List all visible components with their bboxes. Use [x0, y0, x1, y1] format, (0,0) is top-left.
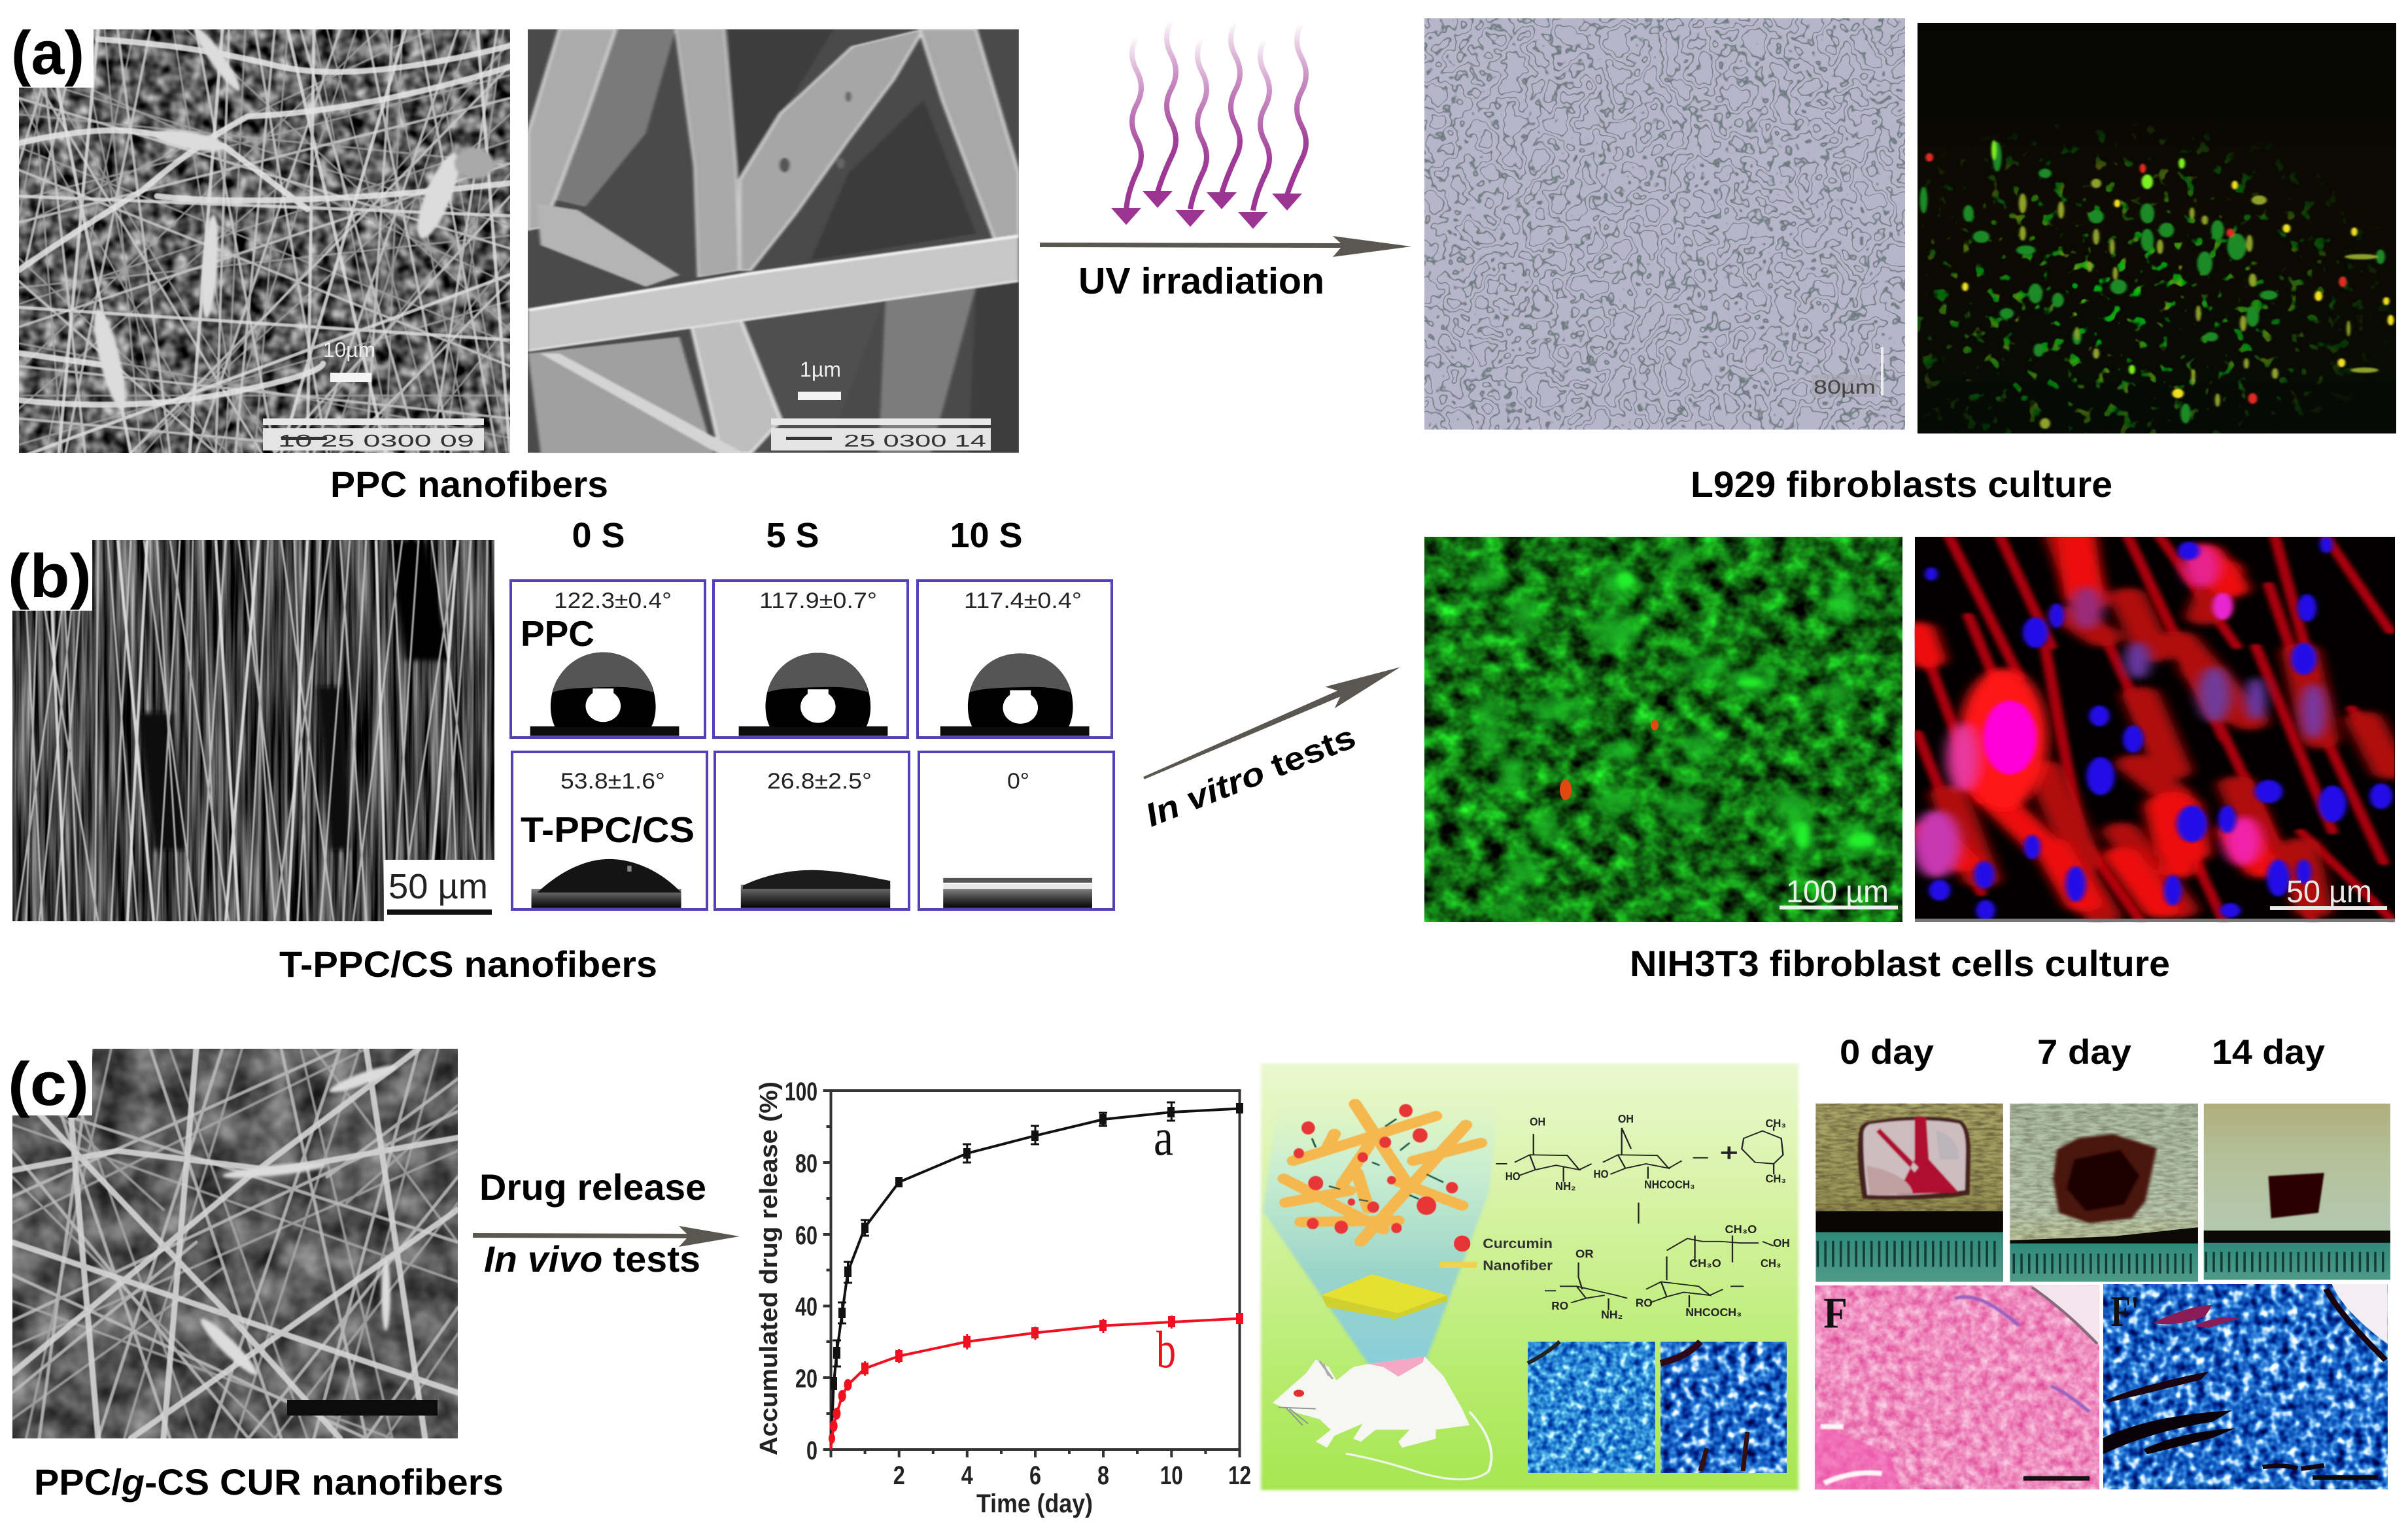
chemical scheme: HO	[1594, 1168, 1609, 1181]
scale label: 1 µm: 1µm	[800, 358, 841, 381]
series b	[829, 1313, 1243, 1450]
inset: stained tissue right	[1660, 1342, 1787, 1473]
panel: curcumin nanofiber schematic	[1261, 1063, 1798, 1490]
mouse	[1273, 1357, 1492, 1480]
chemical scheme	[1496, 1113, 1790, 1321]
chart tick labels: 80	[795, 1149, 817, 1178]
series label b: b	[1156, 1321, 1176, 1379]
panel: L929 fluorescence micrograph	[1918, 23, 2396, 433]
chemical scheme: OH	[1773, 1237, 1790, 1249]
chart tick labels: 40	[795, 1293, 817, 1321]
chemical scheme: NH₂	[1601, 1309, 1623, 1321]
chemical scheme: OH	[1618, 1113, 1634, 1125]
beam	[1263, 1098, 1500, 1364]
caption: T-PPC/CS nanofibers: T-PPC/CS nanofibers	[279, 943, 657, 985]
chart axes	[823, 1091, 1240, 1457]
chemical scheme: CH₃	[1765, 1117, 1786, 1130]
chart: accumulated drug release	[755, 1078, 1251, 1518]
contact angle value: 122.3±0.4°	[554, 588, 672, 613]
chart tick labels	[785, 1078, 1251, 1490]
chart tick labels: 20	[795, 1365, 817, 1393]
chemical scheme: CH₃	[1765, 1172, 1786, 1185]
contact angle value: 0°	[1007, 769, 1029, 794]
chemical scheme: CH₃	[1761, 1257, 1781, 1270]
chart tick labels: 100	[785, 1078, 817, 1106]
column headers: wound healing days	[1840, 1033, 2326, 1072]
chemical scheme: CH₃O	[1725, 1223, 1757, 1236]
scale label: 10 µm: 10µm	[323, 338, 375, 362]
SEM info bar: 25 0300 14	[844, 431, 986, 450]
panel: contact angle PPC 0 s	[511, 581, 705, 738]
label: In vivo tests: In vivo tests	[484, 1238, 700, 1280]
panel: contact angle T-PPC/CS 5 s	[715, 752, 909, 909]
chemical scheme: HO	[1505, 1170, 1521, 1183]
scale bar: 50 µm: 50 µm	[388, 867, 488, 906]
column headers: time	[572, 516, 1023, 555]
chemical scheme: CH₃O	[1689, 1257, 1721, 1270]
scale label: 80 µm: 80µm	[1814, 377, 1876, 398]
inset: stained tissue left	[1528, 1342, 1655, 1473]
panel: contact angle PPC 10 s	[918, 581, 1112, 738]
panel: contact angle PPC 5 s	[714, 581, 908, 738]
panel: T-PPC/CS aligned nanofibers SEM	[12, 540, 494, 921]
panel: NIH3T3 green fluorescence	[1424, 537, 1902, 922]
wound photo day 7	[2010, 1104, 2198, 1282]
chemical scheme: OH	[1530, 1115, 1545, 1129]
SEM info bar	[263, 418, 484, 450]
chemical scheme: NHCOCH₃	[1644, 1178, 1695, 1191]
panel: PPC/g-CS CUR nanofibers SEM	[12, 1049, 458, 1438]
chart tick labels: 12	[1228, 1461, 1251, 1490]
series a	[831, 1102, 1243, 1450]
label: UV irradiation: UV irradiation	[1078, 260, 1324, 302]
chart tick labels: 2	[893, 1461, 905, 1490]
chart tick labels: 60	[795, 1221, 817, 1250]
arrow: drug release	[473, 1226, 740, 1247]
contact angle value: 117.4±0.4°	[964, 588, 1082, 613]
contact angle value: 26.8±2.5°	[767, 769, 872, 794]
chart tick labels: 0	[806, 1436, 817, 1465]
label: PPC: PPC	[521, 613, 594, 654]
icon: UV wavy arrows	[1111, 21, 1306, 229]
label: T-PPC/CS: T-PPC/CS	[521, 809, 695, 850]
label: (c): (c)	[8, 1049, 89, 1118]
label: Drug release: Drug release	[479, 1166, 706, 1208]
scale bar: 100 µm: 100 µm	[1786, 875, 1889, 909]
caption: L929 fibroblasts culture: L929 fibroblasts culture	[1691, 464, 2112, 505]
legend: curcumin and nanofiber: Nanofiber	[1483, 1258, 1553, 1274]
label: (b): (b)	[8, 541, 92, 610]
SEM info bar	[771, 418, 991, 450]
column headers: wound healing days: 0 day	[1840, 1033, 1935, 1072]
scale bar: 50 µm	[384, 860, 494, 921]
SEM info bar: 10 25 0300 09	[278, 431, 474, 450]
panel: histology H and E stain	[1815, 1285, 2101, 1489]
label: F: F	[1823, 1289, 1848, 1337]
scale label: 80 µm	[1812, 347, 1883, 398]
series label a: a	[1154, 1109, 1173, 1166]
chemical scheme: NH₂	[1555, 1180, 1576, 1193]
chemical scheme: OR	[1575, 1248, 1594, 1261]
nanofiber cluster	[1284, 1104, 1481, 1242]
chart tick labels: 4	[961, 1461, 973, 1490]
arrow: UV irradiation	[1040, 236, 1411, 257]
arrow: in vitro tests	[1139, 656, 1405, 789]
column headers: time: 10 S	[950, 516, 1023, 555]
legend: curcumin and nanofiber	[1439, 1236, 1553, 1274]
chart y axis title: Accumulated drug release (%)	[755, 1081, 783, 1455]
caption: PPC nanofibers: PPC nanofibers	[330, 464, 608, 505]
contact angle value: 117.9±0.7°	[759, 588, 877, 613]
panel: histology Masson stain	[2103, 1284, 2388, 1489]
panel: contact angle T-PPC/CS 0 s	[512, 752, 707, 909]
panel: wound photos	[1815, 1104, 2390, 1282]
column headers: wound healing days: 7 day	[2037, 1033, 2132, 1072]
panel: contact angle T-PPC/CS 10 s	[919, 752, 1114, 909]
nanofiber sheet	[1321, 1274, 1447, 1319]
column headers: time: 5 S	[766, 516, 819, 555]
column headers: wound healing days: 14 day	[2212, 1033, 2326, 1072]
caption: NIH3T3 fibroblast cells culture: NIH3T3 fibroblast cells culture	[1630, 943, 2170, 984]
chart tick labels: 10	[1160, 1461, 1183, 1490]
chemical scheme: RO	[1636, 1297, 1653, 1310]
column headers: time: 0 S	[572, 516, 625, 555]
chart tick labels: 6	[1029, 1461, 1041, 1490]
chart x axis title: Time (day)	[976, 1489, 1093, 1518]
chart tick labels: 8	[1097, 1461, 1109, 1490]
panel: PPC nanofibers SEM low magnification	[19, 23, 510, 458]
chemical scheme: RO	[1551, 1300, 1568, 1312]
scale bar	[287, 1400, 438, 1416]
caption: PPC/g-CS CUR nanofibers: PPC/g-CS CUR nanofibers	[34, 1461, 504, 1503]
label: (a): (a)	[11, 18, 84, 87]
wound photo day 14	[2204, 1104, 2390, 1280]
label: F': F'	[2110, 1287, 2140, 1336]
panel: L929 bright-field micrograph	[1424, 18, 1905, 430]
contact angle value: 53.8±1.6°	[560, 769, 665, 794]
scale bar: 50 µm: 50 µm	[2286, 875, 2372, 909]
panel: NIH3T3 red and blue fluorescence	[1912, 536, 2395, 922]
chemical scheme: NHCOCH₃	[1685, 1306, 1742, 1319]
label: In vitro tests: In vitro tests	[1141, 719, 1360, 834]
legend: curcumin and nanofiber: Curcumin	[1483, 1236, 1553, 1251]
wound photo day 0	[1815, 1104, 2003, 1282]
panel: PPC nanofibers SEM high magnification	[528, 29, 1019, 453]
